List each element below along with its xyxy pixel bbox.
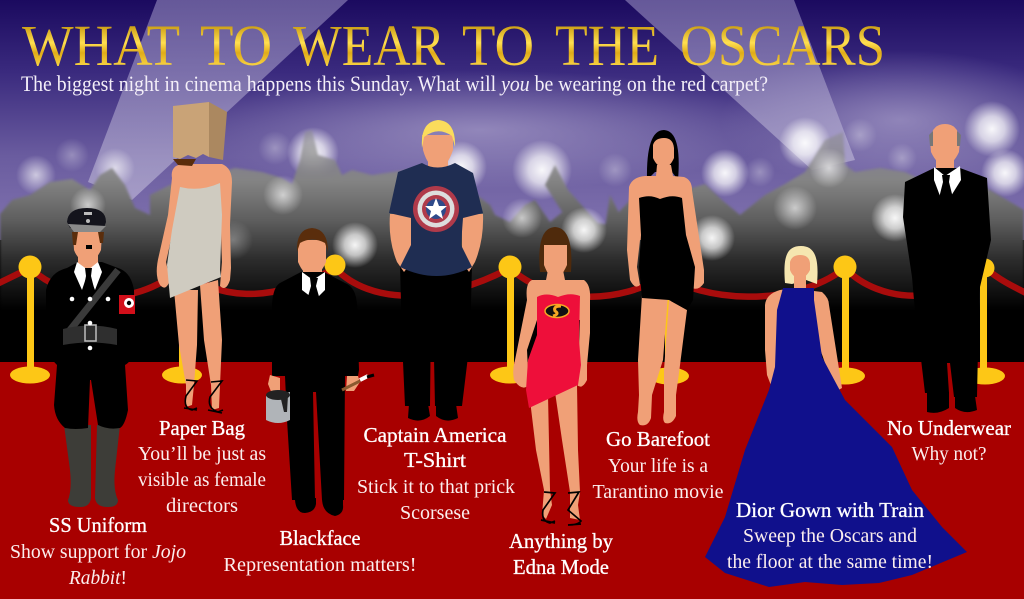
- background: night sky: [0, 0, 1024, 240]
- title: TO: [462, 13, 534, 78]
- label: dior gown: [727, 498, 933, 573]
- head: [930, 124, 960, 172]
- label: captain america t-shirt: Captain America: [364, 423, 507, 447]
- label: captain america t-shirt: Stick it to that prick: [357, 476, 516, 498]
- label: SS uniform: SS Uniform: [49, 513, 147, 537]
- armband: [119, 295, 135, 314]
- label: paper bag: You’ll be just as: [138, 443, 266, 465]
- label: paper bag: Paper Bag: [159, 416, 245, 440]
- label: dior gown: Dior Gown with Train: [736, 498, 924, 522]
- hair: [647, 130, 679, 180]
- spotlight beams: [88, 0, 855, 200]
- label: go barefoot: Go Barefoot: [606, 427, 710, 451]
- label: paper bag: directors: [166, 495, 238, 517]
- figure: no underwear: [903, 124, 991, 413]
- figure: paper bag: [157, 102, 232, 413]
- arms: [390, 214, 483, 272]
- logo: [545, 304, 569, 318]
- buttons: [70, 297, 110, 350]
- face and torso: [627, 138, 704, 289]
- label: dior gown: the floor at the same time!: [727, 551, 933, 573]
- dress: [526, 294, 581, 408]
- label: SS uniform: Show support for Jojo: [10, 541, 186, 563]
- crowd silhouette: [0, 130, 1024, 370]
- figure: blackface: [266, 228, 374, 516]
- label: blackface: [224, 526, 416, 576]
- hands: [268, 375, 360, 394]
- figure: captain america t-shirt: [389, 120, 483, 421]
- title: [22, 13, 885, 78]
- label: no underwear: [887, 416, 1011, 465]
- hair: [539, 227, 571, 272]
- pants: [400, 265, 472, 406]
- gown: [705, 288, 967, 587]
- title: WHAT: [22, 13, 180, 78]
- cross strap: [66, 270, 118, 335]
- figure: dior gown: [705, 246, 967, 587]
- label: SS uniform: [10, 513, 186, 589]
- shoes: [184, 380, 223, 413]
- coat and breeches: [46, 262, 135, 429]
- label: captain america t-shirt: [357, 423, 516, 524]
- label: edna mode: [509, 529, 613, 579]
- title: TO: [200, 13, 272, 78]
- face and torso: [513, 245, 590, 388]
- legs: [174, 280, 222, 410]
- stanchion posts: [10, 254, 1005, 384]
- title: OSCARS: [680, 13, 885, 78]
- figure: edna mode dress: [513, 227, 590, 525]
- head: [73, 232, 102, 268]
- hair: [173, 159, 196, 166]
- red carpet: [0, 362, 1024, 599]
- paint can: [266, 392, 290, 423]
- foreground flashes: [70, 148, 919, 268]
- collar and tie: [74, 262, 102, 290]
- shirt and tie: [934, 166, 961, 196]
- title: WEAR: [293, 13, 445, 78]
- cap: [67, 208, 106, 228]
- paper bag: [173, 102, 209, 159]
- label: blackface: Blackface: [280, 526, 360, 550]
- label: no underwear: No Underwear: [887, 416, 1011, 440]
- label: blackface: Representation matters!: [224, 554, 416, 576]
- label: paper bag: visible as female: [138, 469, 266, 491]
- legs: [530, 385, 580, 520]
- label: edna mode: Edna Mode: [513, 555, 609, 579]
- label: paper bag: [138, 416, 266, 517]
- figure: barefoot: [627, 130, 704, 425]
- head: [298, 240, 326, 280]
- title: THE: [555, 13, 659, 78]
- paint brush: [342, 381, 360, 390]
- figure: SS uniform: [46, 208, 135, 507]
- shoes: [541, 492, 581, 525]
- shirt and tie: [302, 272, 325, 300]
- label: go barefoot: Your life is a: [608, 455, 708, 477]
- label: dior gown: Sweep the Oscars and: [743, 525, 917, 547]
- velvet rope: [0, 268, 1024, 297]
- t-shirt: [389, 163, 483, 276]
- label: captain america t-shirt: T-Shirt: [404, 448, 466, 472]
- dress: [167, 183, 222, 298]
- label: SS uniform: Rabbit!: [68, 567, 127, 589]
- background flashes: [16, 101, 1024, 200]
- label: go barefoot: Tarantino movie: [592, 481, 724, 503]
- face, shoulders and arms: [765, 255, 842, 392]
- boots: [64, 425, 120, 507]
- subtitle: The biggest night in cinema happens this Sunday. What will you be wearing on the red carpet?: [21, 71, 768, 96]
- label: edna mode: Anything by: [509, 529, 613, 553]
- legs: [637, 295, 687, 425]
- dress: [639, 196, 695, 310]
- suit: [272, 272, 359, 500]
- shield logo: [413, 186, 459, 232]
- label: go barefoot: [592, 427, 724, 503]
- label: captain america t-shirt: Scorsese: [400, 502, 470, 524]
- moustache: [86, 245, 92, 249]
- belt: [63, 326, 117, 345]
- head: [422, 135, 453, 170]
- torso and arms: [157, 164, 232, 288]
- suit: [903, 168, 991, 397]
- label: no underwear: Why not?: [912, 443, 986, 465]
- hair: [784, 246, 818, 284]
